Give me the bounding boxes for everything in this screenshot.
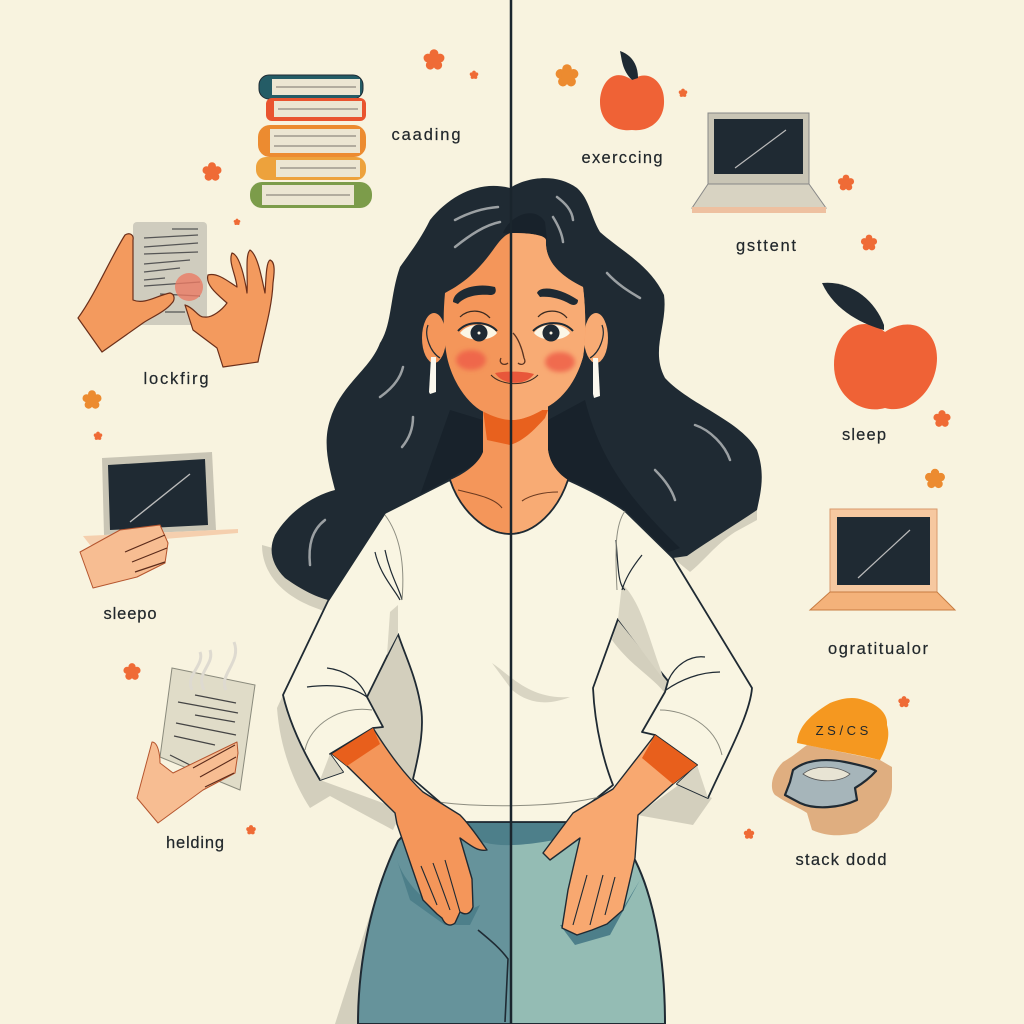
label: sleep: sleep — [842, 426, 886, 444]
icon: grey laptop — [692, 113, 826, 213]
label: helding: helding — [166, 834, 224, 852]
right arm — [543, 735, 697, 935]
icon: small apple — [600, 51, 664, 130]
hair — [272, 178, 762, 600]
decor: orange flowers — [82, 49, 951, 839]
nose — [500, 333, 525, 364]
cheeks — [456, 350, 575, 372]
cuffs and left arm — [332, 728, 487, 925]
ears — [422, 313, 608, 363]
icon: hands holding paper — [78, 222, 274, 367]
icon: note and hand — [137, 642, 255, 823]
icon: stack of books — [250, 75, 372, 208]
label: lockfirg: lockfirg — [144, 370, 208, 388]
figure shadows — [262, 505, 757, 1024]
finger lines — [421, 860, 615, 925]
neck and chest — [450, 400, 568, 534]
neck shadow — [483, 410, 548, 445]
brows — [453, 285, 578, 305]
earrings — [429, 357, 600, 398]
icon: laptop and hand — [80, 452, 238, 588]
eyes — [458, 311, 573, 342]
label: gsttent: gsttent — [736, 237, 796, 255]
shirt folds — [307, 540, 720, 697]
mouth — [495, 372, 534, 383]
icon: large apple — [822, 283, 937, 409]
pants — [358, 822, 665, 1024]
icon: brain and device — [772, 698, 892, 835]
shirt hem lines — [305, 511, 722, 806]
hair highlights — [310, 197, 730, 565]
face — [444, 233, 585, 420]
pants shading — [460, 823, 570, 845]
label: exerccing: exerccing — [582, 149, 662, 167]
orange cuffs — [332, 728, 697, 784]
center divider — [510, 0, 512, 1024]
icon: peach laptop — [810, 509, 955, 610]
mouth line — [491, 375, 538, 384]
icon: brain and device: Z S / C S — [816, 723, 869, 738]
figure: woman — [262, 178, 762, 1024]
label: sleepo: sleepo — [104, 605, 156, 623]
shirt — [283, 480, 752, 822]
label: caading: caading — [392, 126, 460, 144]
label: stack dodd: stack dodd — [796, 851, 886, 869]
shirt shading — [320, 584, 708, 798]
label: ogratitualor: ogratitualor — [828, 640, 928, 658]
hair shading — [420, 213, 680, 555]
